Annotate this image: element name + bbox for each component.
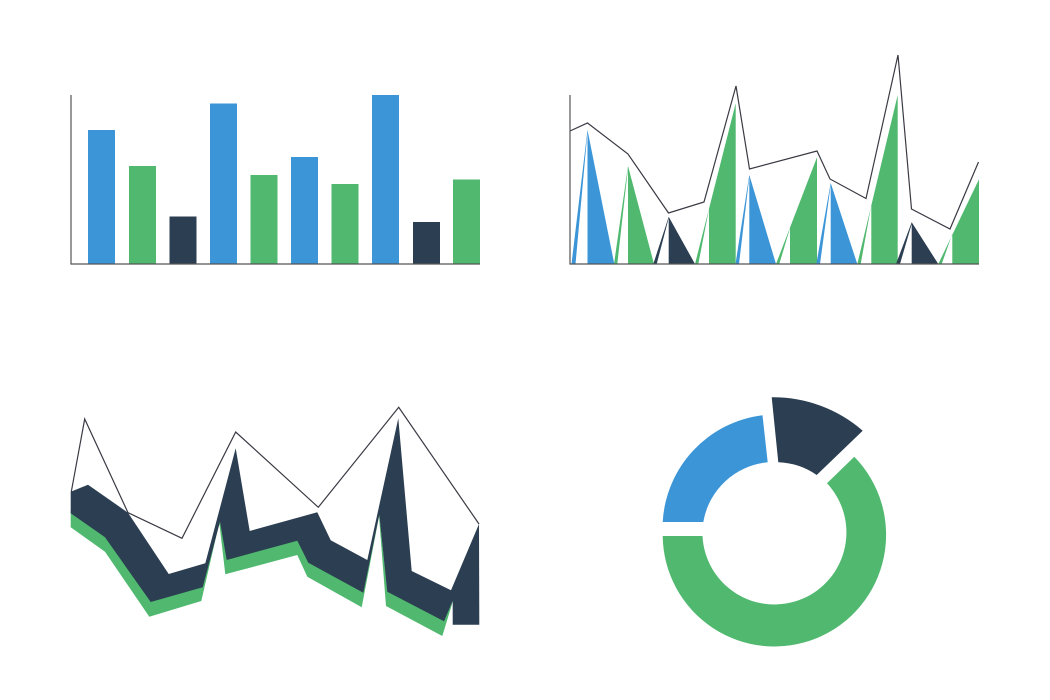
segment: blue [663, 415, 768, 522]
panel: layered area chart [71, 407, 479, 636]
segment: navy [772, 397, 863, 475]
bars [88, 95, 480, 264]
outline line [71, 407, 479, 538]
panel: triangle spike chart [570, 55, 979, 264]
green area [71, 510, 453, 636]
axes [570, 95, 979, 264]
axes [71, 95, 480, 264]
panel: donut chart [663, 397, 886, 646]
triangles [572, 95, 979, 264]
segment: green [663, 457, 886, 646]
navy area [71, 418, 479, 625]
panel: bar chart [71, 95, 480, 264]
trend line [570, 55, 978, 229]
